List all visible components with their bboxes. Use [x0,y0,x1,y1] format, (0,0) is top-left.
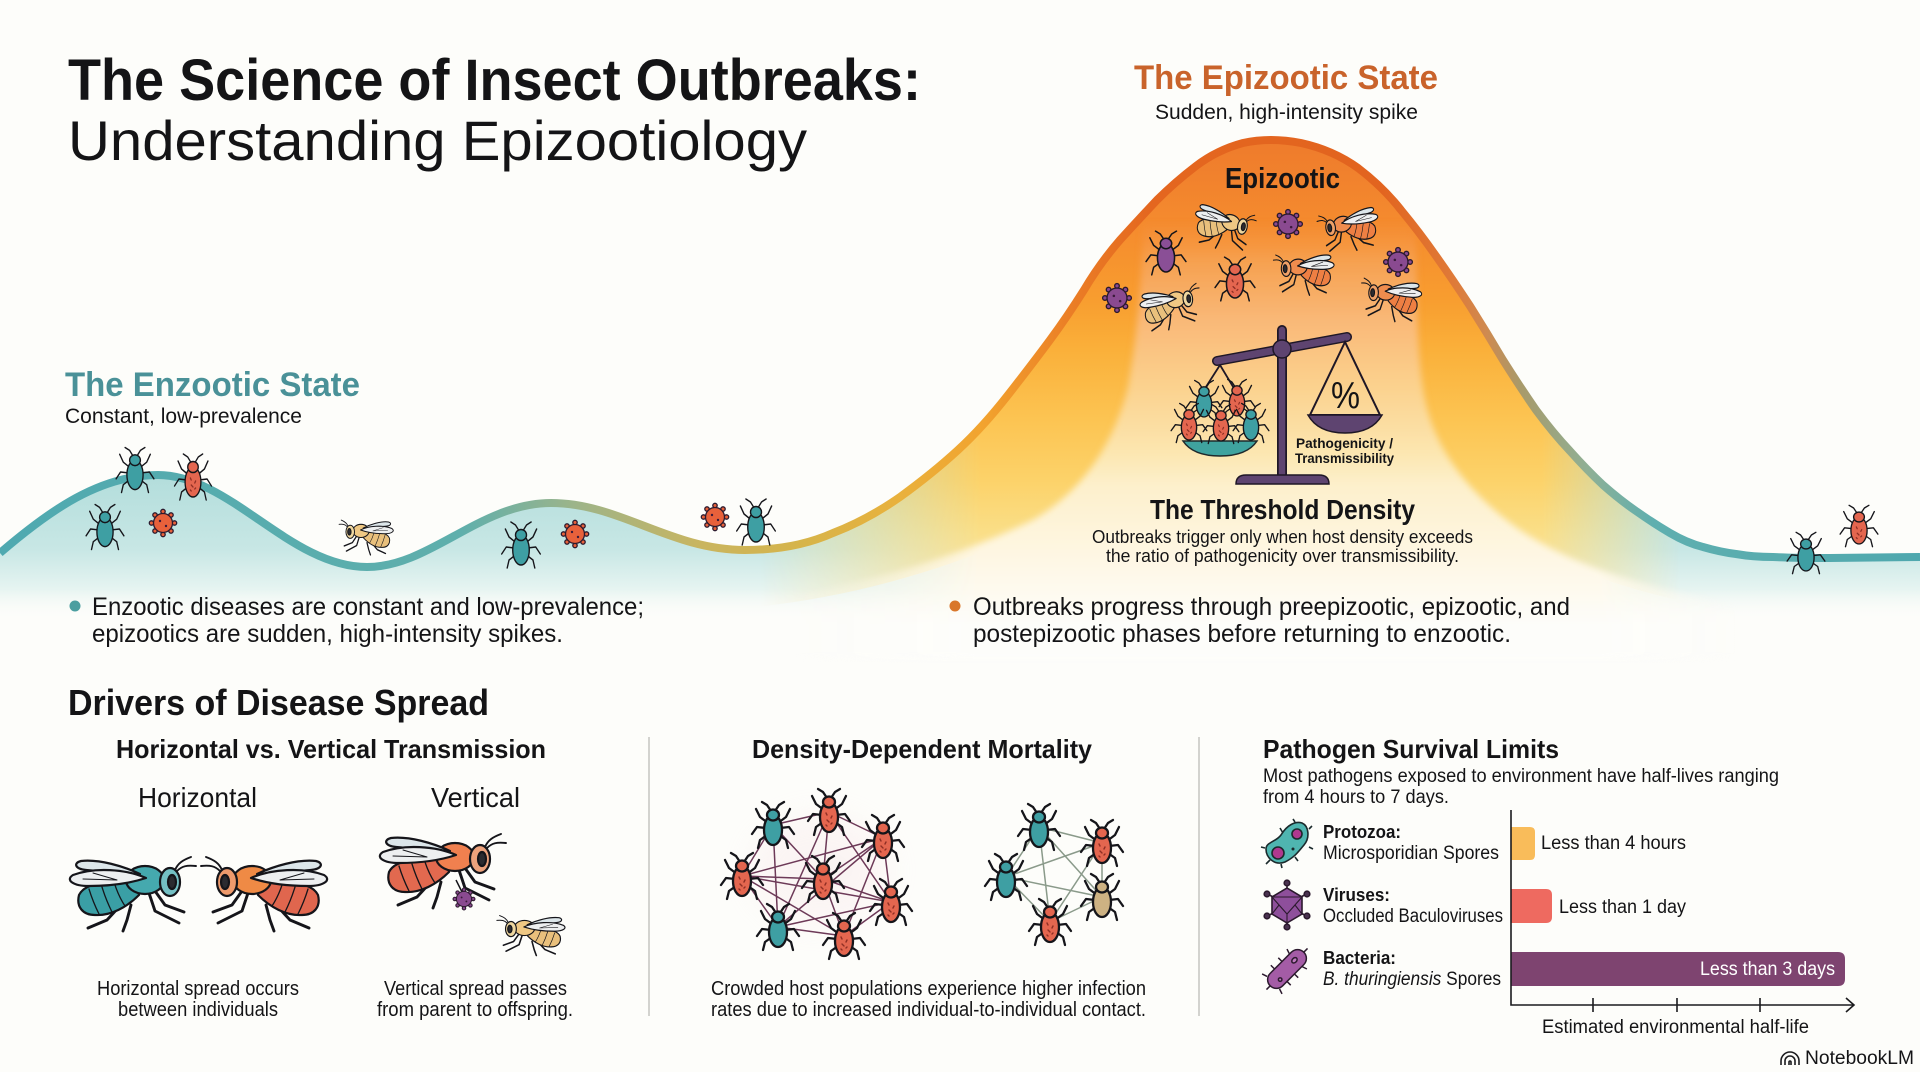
icon: balance scale: % [1331,375,1360,417]
insects on enzootic curve [86,447,1878,574]
panel: pathogen survival limits: Most pathogens exposed to environment have half-lives ranging [1263,766,1779,787]
bullet: enzootic summary: Enzootic diseases are constant and low-prevalence; [92,593,644,621]
threshold density text: Outbreaks trigger only when host density exceeds [1092,527,1473,547]
title: Understanding Epizootiology [68,109,807,172]
bullet: enzootic summary [70,593,644,648]
bullet: enzootic summary: epizootics are sudden, high-intensity spikes. [92,620,563,648]
scale label [1295,435,1394,466]
panel: horizontal vs vertical transmission: Horizontal vs. Vertical Transmission [116,734,546,764]
panel: density-dependent mortality: Crowded host populations experience higher infection [711,978,1146,1000]
label: protozoa: Protozoa: [1323,822,1401,842]
panel: horizontal vs vertical transmission [70,734,573,1021]
scale label: Pathogenicity / [1296,435,1393,451]
label: bacteria: Bacteria: [1323,948,1396,968]
right teal area [1536,410,1920,625]
vertical transmission column [377,782,573,1021]
heading: enzootic state [65,366,360,428]
bar chart: environmental half-life: Less than 4 hours [1541,833,1686,854]
heading: epizootic state [1134,59,1438,124]
bar chart: environmental half-life: Estimated environmental half-life [1542,1017,1809,1038]
label: viruses [1323,885,1503,927]
heading: enzootic state: The Enzootic State [65,366,360,404]
panel: pathogen survival limits [1257,734,1854,1038]
vertical transmission column: Vertical spread passes [384,978,567,1000]
peak orange band [782,144,1668,603]
horizontal transmission column: between individuals [118,999,278,1021]
panel: density-dependent mortality [711,734,1146,1021]
heading: epizootic state: The Epizootic State [1134,59,1438,97]
panel: density-dependent mortality: Density-Dependent Mortality [752,734,1093,764]
label: bacteria: B. thuringiensis Spores [1323,969,1501,990]
horizontal transmission column: Horizontal spread occurs [97,978,299,1000]
icon: bacteria [1257,939,1317,999]
label: viruses: Occluded Baculoviruses [1323,906,1503,927]
heading: enzootic state: Constant, low-prevalence [65,405,302,428]
panel: pathogen survival limits: from 4 hours to 7 days. [1263,787,1449,808]
crowded host network [721,789,912,959]
horizontal transmission column [70,782,327,1021]
bullet: outbreak phases: Outbreaks progress through preepizootic, epizootic, and [973,593,1570,621]
horizontal transmission column: Horizontal [138,782,257,813]
label: protozoa [1323,822,1499,864]
bullet: outbreak phases [950,593,1570,648]
title [68,48,921,172]
peak central pale region [852,232,1667,602]
icon: protozoa [1261,819,1313,868]
curve line [0,140,1920,567]
sparse host network [985,804,1123,945]
heading: epizootic state: Sudden, high-intensity spike [1155,101,1418,124]
label: epizootic: Epizootic [1225,163,1340,195]
threshold density text: The Threshold Density [1150,494,1415,525]
label: bacteria [1323,948,1501,990]
title: The Science of Insect Outbreaks: [68,48,921,113]
vertical transmission column: Vertical [431,782,520,813]
panel: pathogen survival limits: Pathogen Survival Limits [1263,734,1559,764]
chart: epizootic curve with shaded areas [0,140,1920,660]
threshold density text [1092,494,1473,566]
bullet: outbreak phases: postepizootic phases before returning to enzootic. [973,620,1511,648]
heading: drivers of disease spread: Drivers of Disease Spread [68,682,489,723]
icon: virus [1264,880,1310,930]
bar chart: environmental half-life: Less than 1 day [1559,897,1686,918]
bar chart: environmental half-life: Less than 3 days [1700,959,1835,980]
bar chart: environmental half-life [1511,810,1854,1038]
label: viruses: Viruses: [1323,885,1390,905]
icon: balance scale [1171,330,1382,484]
logo: NotebookLM: NotebookLM [1805,1048,1914,1069]
panel: density-dependent mortality: rates due to increased individual-to-individual contact. [711,999,1146,1021]
enzootic teal area [0,395,1008,625]
threshold density text: the ratio of pathogenicity over transmissibility. [1106,546,1459,566]
scale label: Transmissibility [1295,450,1394,466]
insects and pathogens in epizootic peak [1103,201,1422,334]
label: protozoa: Microsporidian Spores [1323,843,1499,864]
vertical transmission column: from parent to offspring. [377,999,573,1021]
